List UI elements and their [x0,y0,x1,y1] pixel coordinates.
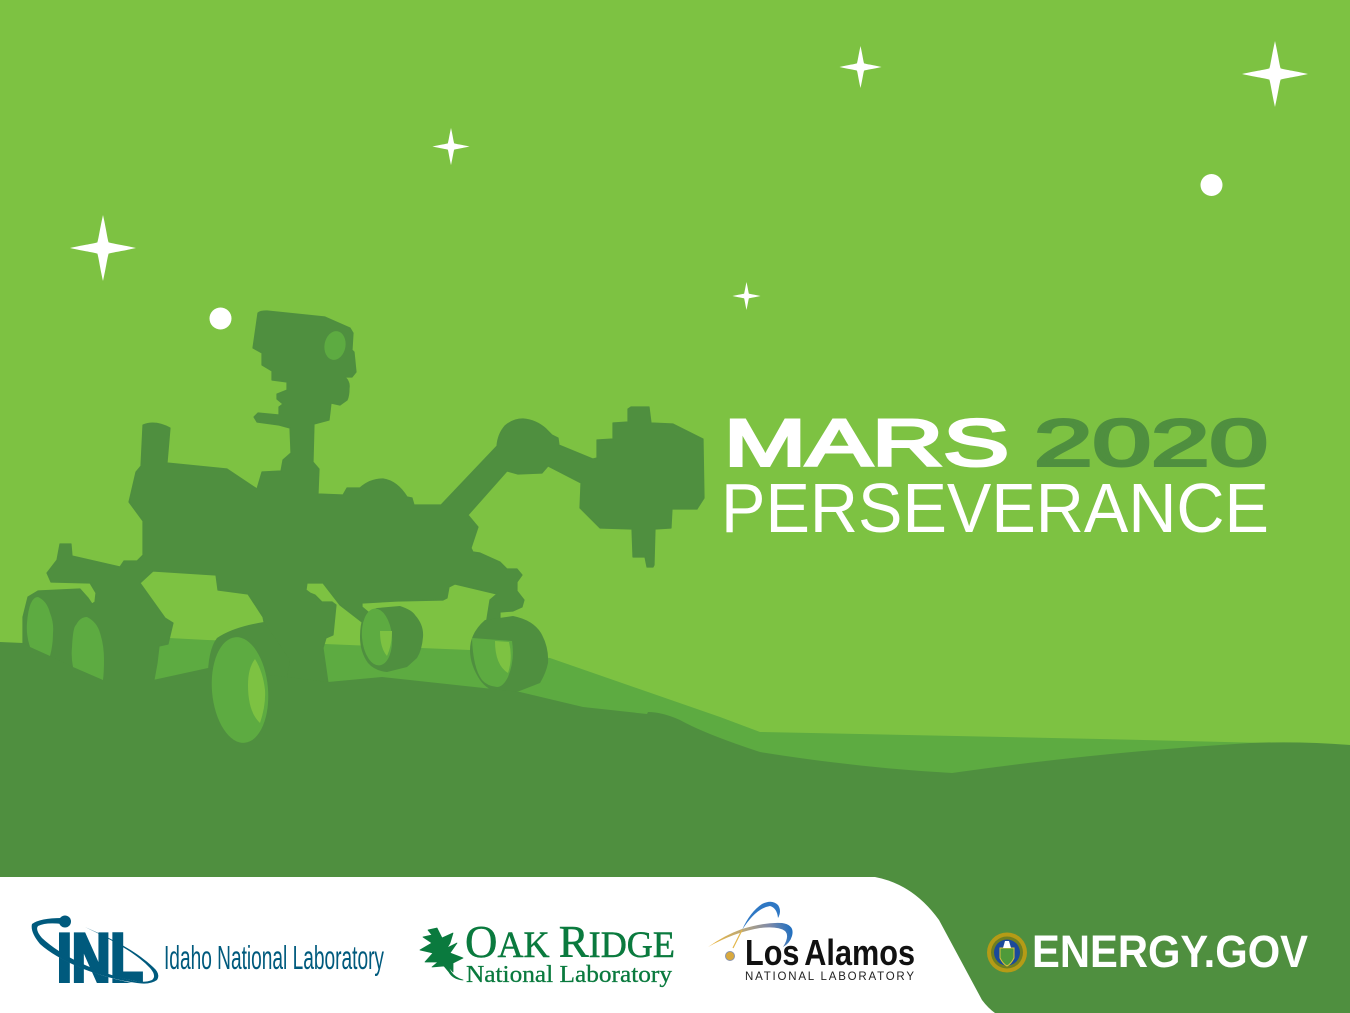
oak leaf [420,928,463,980]
Oak Ridge wordmark: OAK RIDGE [465,916,675,967]
star: small centre [732,282,760,310]
atom swoosh: gold to blue [708,923,793,947]
logo: Los Alamos National Laboratory [708,902,915,983]
title word: PERSEVERANCE: PERSEVERANCE [721,469,1269,547]
star: upper middle [432,128,470,165]
white logo footer [0,877,995,1013]
big front wheel rim [208,622,290,745]
INL atom dot [59,916,71,928]
star: top right [1242,41,1308,107]
star: top centre [840,46,882,88]
star: left [70,215,136,281]
title word: MARS: MARS [724,406,1009,480]
middle wheel [360,606,423,672]
INL name: Idaho National Laboratory [164,939,384,976]
dot: right [1200,174,1222,196]
INL letters: INL [57,920,143,996]
foreground hill [0,642,1350,1013]
rover body, mast and arm [20,311,704,700]
atom stem [733,930,742,948]
DOE seal [987,932,1027,972]
title: Mars 2020 Perseverance [721,406,1269,547]
Los Alamos wordmark: Los Alamos [745,932,915,973]
logo: Oak Ridge National Laboratory [420,916,675,988]
title word: 2020: 2020 [1034,406,1268,480]
background hill [0,637,1350,800]
atom swoosh: blue [742,902,780,930]
far right wheel [470,616,548,693]
logo: Energy.gov [987,926,1308,977]
ENERGY.GOV wordmark: ENERGY.GOV [1032,926,1308,977]
rear left wheel lights [27,597,104,680]
logo: Idaho National Laboratory [32,916,384,996]
camera lens [322,329,348,362]
National Laboratory line: National Laboratory [466,962,672,988]
Los Alamos subtitle: NATIONAL LABORATORY [745,971,914,983]
INL orbit white cut [42,945,150,985]
atom nucleus [726,952,734,960]
rover silhouette [20,311,704,745]
big wheel light [207,635,273,745]
stars and dots [70,41,1308,330]
dot: left [210,308,232,330]
INL orbit swoosh [32,918,158,984]
